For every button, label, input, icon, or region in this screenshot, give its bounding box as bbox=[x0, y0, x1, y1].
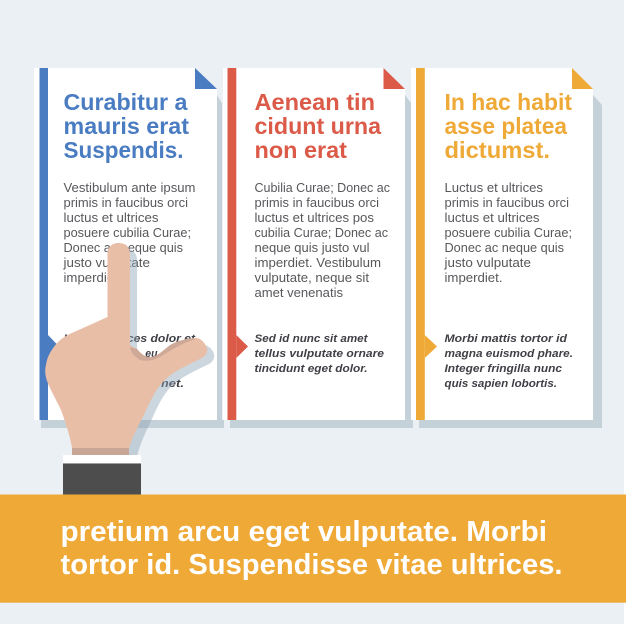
heading: red card: Aenean tin bbox=[254, 89, 375, 115]
text block: yellow card body: luctus et ultrices bbox=[444, 211, 540, 225]
text block: red card body: neque quis justo vul bbox=[254, 241, 370, 255]
text block: yellow card note: Integer fringilla nunc bbox=[444, 363, 563, 375]
text block: blue card note: quis dolor sit amet. bbox=[64, 378, 184, 390]
text block: red card body: cubilia Curae; Donec ac bbox=[254, 226, 388, 240]
text block: red card body: amet venenatis bbox=[254, 286, 343, 300]
heading: blue card: mauris erat bbox=[64, 113, 189, 139]
text block: red card body: primis in faucibus orci bbox=[254, 196, 379, 210]
text block: blue card body: posuere cubilia Curae; bbox=[64, 226, 191, 240]
text block: red card body bbox=[254, 181, 390, 300]
panel: blue card bbox=[34, 68, 224, 428]
heading: blue card bbox=[64, 89, 189, 163]
text block: yellow card note bbox=[444, 333, 573, 390]
panel: red card bbox=[223, 68, 413, 428]
text block: red card note: tincidunt eget dolor. bbox=[254, 363, 368, 375]
text block: red card note: Sed id nunc sit amet bbox=[254, 333, 369, 345]
heading: red card: cidunt urna bbox=[254, 113, 382, 139]
text block: blue card body: imperdiet. bbox=[64, 271, 122, 285]
text block: blue card body: Vestibulum ante ipsum bbox=[64, 181, 196, 195]
text block: blue card body bbox=[62, 181, 196, 285]
text block: yellow card body: justo vulputate bbox=[443, 256, 531, 270]
text block: blue card body: Donec ac neque quis bbox=[64, 241, 183, 255]
text block: red card note bbox=[254, 333, 385, 375]
banner text: pretium arcu eget vulputate. Morbi bbox=[60, 516, 547, 548]
text block: yellow card note: magna euismod phare. bbox=[444, 348, 573, 360]
text block: red card note: tellus vulputate ornare bbox=[254, 348, 385, 360]
text block: red card body: imperdiet. Vestibulum bbox=[254, 256, 381, 270]
panel: yellow card bbox=[411, 68, 602, 428]
text block: blue card note: Integer fringilla bbox=[64, 363, 158, 375]
heading: yellow card: asse platea bbox=[444, 113, 568, 139]
text block: blue card body: primis in faucibus orci bbox=[64, 196, 188, 210]
banner text bbox=[60, 516, 562, 581]
text block: blue card body: luctus et ultrices bbox=[64, 211, 158, 225]
heading: yellow card bbox=[444, 89, 572, 163]
text block: blue card body: justo vulputate bbox=[62, 256, 150, 270]
banner bbox=[0, 494, 626, 603]
text block: yellow card note: quis sapien lobortis. bbox=[444, 378, 557, 390]
heading: red card: non erat bbox=[254, 137, 347, 163]
text block: blue card note: Mauris at tellus, eu bbox=[64, 348, 158, 360]
text block: red card body: Cubilia Curae; Donec ac bbox=[254, 181, 390, 195]
heading: blue card: Suspendis. bbox=[64, 137, 184, 163]
text block: yellow card body: imperdiet. bbox=[444, 271, 502, 285]
text block: red card body: luctus et ultrices pos bbox=[254, 211, 374, 225]
heading: yellow card: dictumst. bbox=[444, 137, 550, 163]
text block: yellow card body: Luctus et ultrices bbox=[444, 181, 543, 195]
text block: blue card note: Lorem ultrices dolor et bbox=[64, 333, 196, 345]
heading: yellow card: In hac habit bbox=[444, 89, 572, 115]
icon: pointing hand bbox=[45, 243, 214, 494]
text block: red card body: vulputate, neque sit bbox=[254, 271, 370, 285]
text block: yellow card note: Morbi mattis tortor id bbox=[444, 333, 568, 345]
text block: yellow card body bbox=[443, 181, 572, 285]
text block: yellow card body: Donec ac neque quis bbox=[444, 241, 564, 255]
heading: blue card: Curabitur a bbox=[64, 89, 188, 115]
heading: red card bbox=[254, 89, 382, 163]
banner text: tortor id. Suspendisse vitae ultrices. bbox=[60, 549, 562, 581]
text block: yellow card body: posuere cubilia Curae; bbox=[444, 226, 572, 240]
text block: blue card note bbox=[64, 333, 196, 390]
text block: yellow card body: primis in faucibus orci bbox=[444, 196, 569, 210]
